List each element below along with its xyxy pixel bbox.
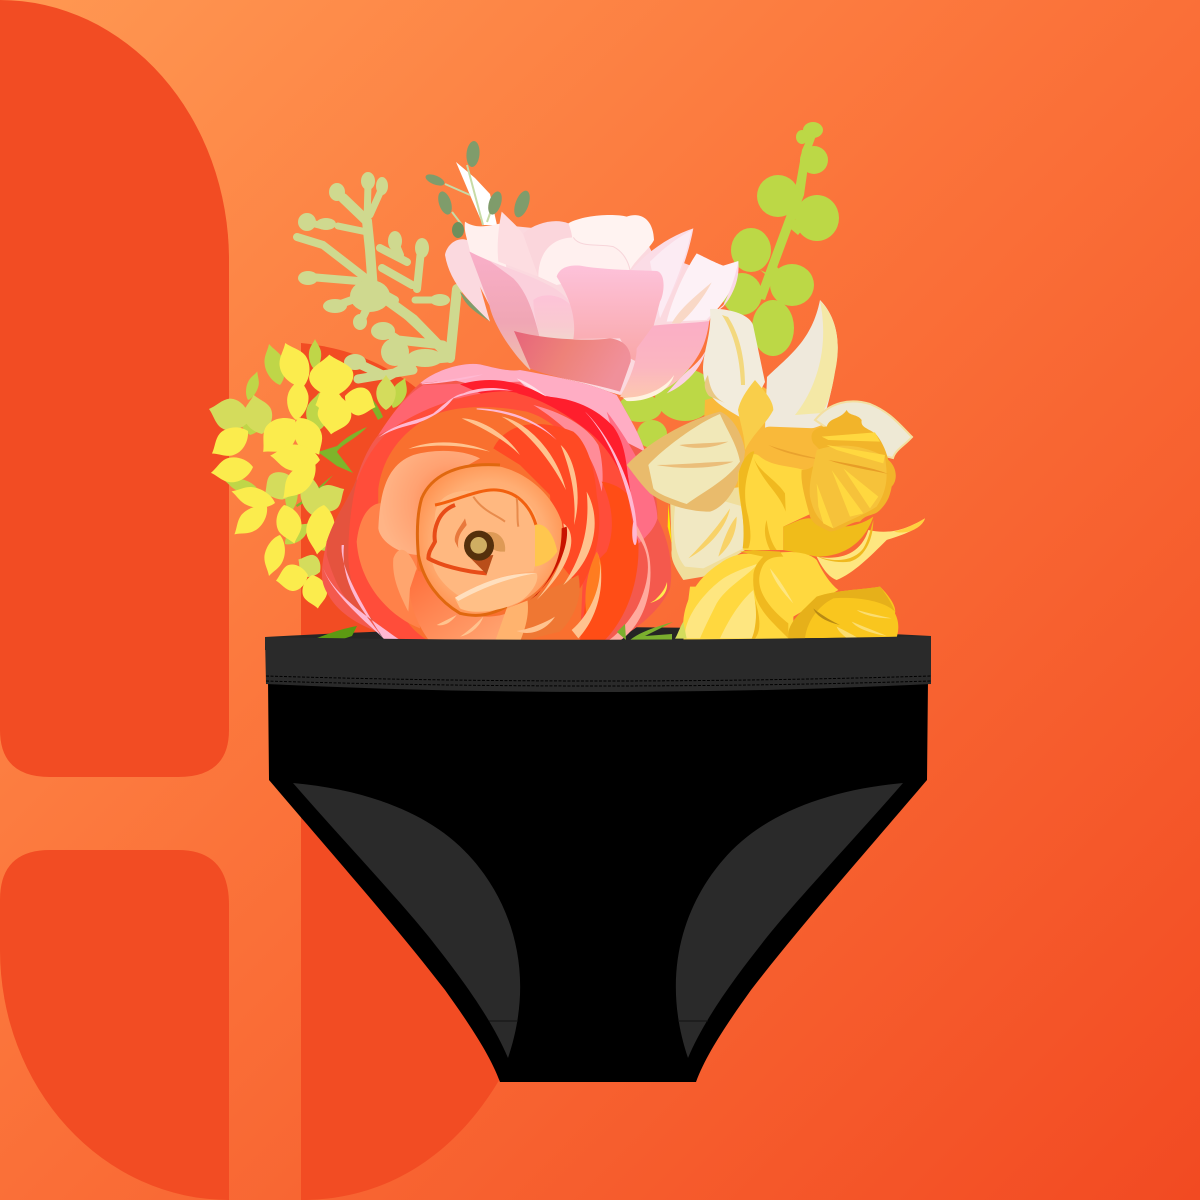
background shape: central D form	[301, 343, 510, 1200]
daffodil upper back petals	[700, 300, 912, 520]
ranunculus outer petals	[322, 364, 671, 642]
background shape: lower left	[0, 850, 229, 1200]
eucalyptus branch	[618, 122, 839, 448]
ranunculus inner rose	[417, 464, 563, 615]
lower daffodil	[683, 587, 793, 640]
dusty miller foliage	[297, 172, 457, 379]
ranunculus pink highlights	[323, 374, 637, 640]
trumpet base	[745, 427, 827, 480]
yellow foliage	[205, 338, 412, 611]
underwear	[265, 636, 931, 1082]
petal behind corona	[783, 517, 873, 557]
ranunculus	[322, 364, 671, 642]
underwear back band	[265, 627, 931, 650]
left petal	[627, 412, 745, 512]
background shape: upper left arch	[0, 0, 229, 777]
waistband	[265, 636, 931, 692]
underwear body	[268, 680, 928, 1082]
left leg panel	[293, 783, 520, 1058]
small green leaves at waistband	[317, 582, 673, 641]
ranunculus centre eye	[464, 531, 494, 561]
peony	[445, 212, 739, 401]
long right petal	[817, 518, 925, 580]
lower yellow petals	[738, 454, 817, 550]
sage sprig with white petal	[424, 140, 533, 238]
lower left petal	[670, 487, 745, 580]
ranunculus peach crescents	[408, 417, 601, 638]
right leg panel	[676, 783, 903, 1058]
daffodil upper bloom	[627, 380, 925, 640]
corona	[801, 410, 896, 532]
